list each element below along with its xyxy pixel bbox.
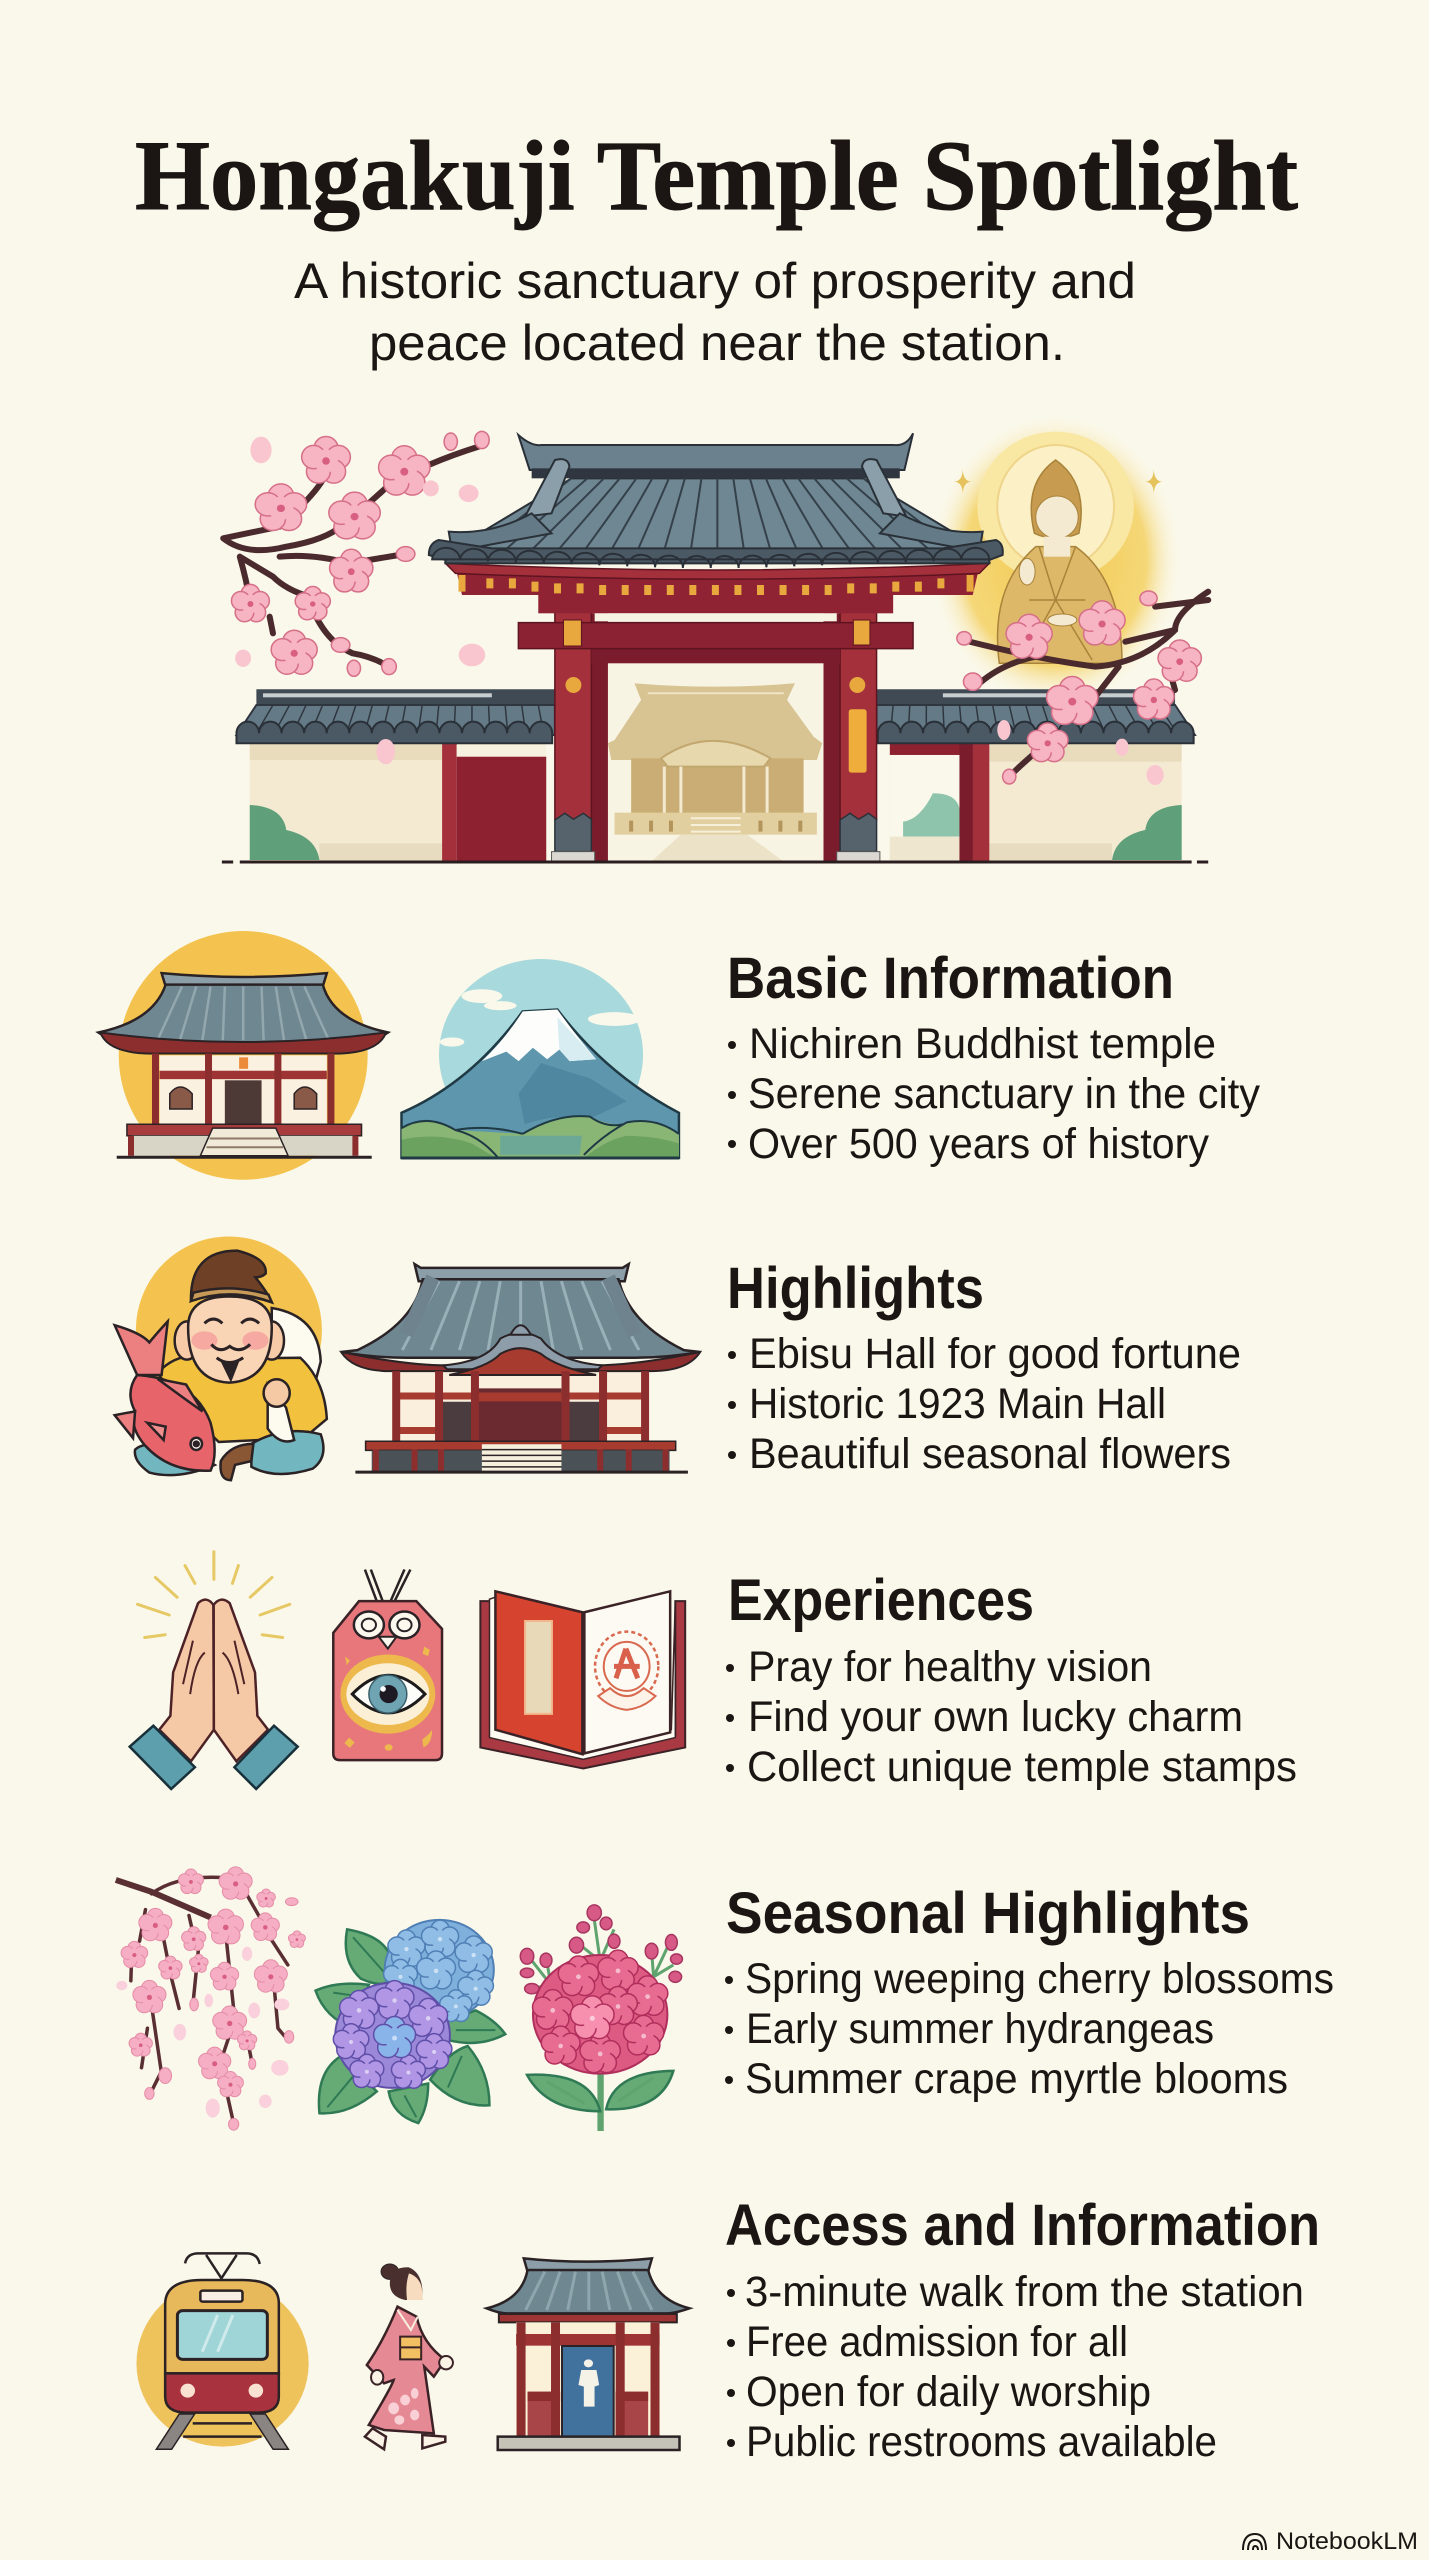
section: highlights icons — [115, 1236, 700, 1480]
text block: basic information — [727, 946, 1260, 1168]
icon: Mount Fuji — [402, 959, 679, 1170]
section: seasonal highlights icons — [116, 1867, 682, 2131]
text block: highlights — [727, 1256, 1241, 1478]
text block: highlights: Historic 1923 Main Hall — [749, 1380, 1166, 1428]
icon: restroom pavilion — [487, 2258, 689, 2450]
text block: highlights: Ebisu Hall for good fortune — [749, 1330, 1241, 1378]
text block: basic information: Nichiren Buddhist temple — [749, 1020, 1216, 1068]
icon: small temple on yellow sun — [98, 931, 388, 1180]
text block: highlights: Highlights — [727, 1256, 984, 1321]
subtitle: peace located near the station. — [369, 315, 1065, 371]
icon: hydrangeas — [315, 1920, 505, 2123]
section: access icons — [136, 2253, 689, 2450]
left cherry branch — [223, 431, 489, 676]
right wall — [877, 689, 1195, 862]
distant main hall seen through the gate — [608, 663, 824, 862]
Ebisu face — [191, 1319, 268, 1383]
text block: basic information: Basic Information — [727, 946, 1174, 1011]
text block: experiences: Pray for healthy vision — [748, 1643, 1152, 1691]
text block: basic information: Serene sanctuary in the city — [748, 1070, 1260, 1118]
text block: experiences — [726, 1568, 1297, 1791]
text block: seasonal highlights: Spring weeping cherry blossoms — [745, 1955, 1334, 2003]
icon: Ebisu with sea bream — [115, 1236, 327, 1480]
icon: historic main hall — [341, 1264, 700, 1472]
left wall — [236, 689, 555, 862]
icon: praying hands — [130, 1552, 298, 1789]
text block: access and information: Free admission for all — [746, 2318, 1128, 2366]
text block: experiences: Collect unique temple stamps — [747, 1743, 1297, 1791]
title: Hongakuji Temple Spotlight — [135, 120, 1298, 231]
text block: access and information: Access and Information — [725, 2193, 1320, 2258]
right cherry branch — [957, 591, 1208, 784]
text block: seasonal highlights: Early summer hydrangeas — [746, 2005, 1214, 2053]
golden Kannon figure — [930, 413, 1182, 707]
text block: seasonal highlights: Seasonal Highlights — [726, 1881, 1250, 1946]
ground line — [222, 860, 1208, 863]
section: basic information icons — [98, 931, 679, 1180]
text block: experiences: Experiences — [728, 1568, 1034, 1633]
icon: crape myrtle — [520, 1905, 682, 2131]
text block: seasonal highlights: Summer crape myrtle blooms — [745, 2055, 1288, 2103]
falling petals — [235, 437, 1164, 785]
hero illustration: temple gate with cherry blossoms and Kannon — [222, 413, 1208, 862]
subtitle: A historic sanctuary of prosperity and — [294, 253, 1136, 309]
icon: omamori eye charm — [333, 1570, 442, 1760]
icon: woman in kimono — [365, 2264, 453, 2449]
main gate pillars and beams — [518, 595, 913, 862]
text block: experiences: Find your own lucky charm — [748, 1693, 1243, 1741]
NotebookLM logo and watermark: NotebookLM — [1276, 2528, 1418, 2555]
text block: access and information — [725, 2193, 1320, 2466]
icon: weeping cherry blossoms — [116, 1867, 305, 2130]
subtitle — [294, 253, 1136, 371]
gate roof — [429, 433, 1003, 595]
text block: seasonal highlights — [725, 1881, 1334, 2103]
icon: goshuin stamp book — [480, 1591, 685, 1768]
text block: access and information: Public restrooms available — [746, 2418, 1217, 2466]
text block: highlights: Beautiful seasonal flowers — [749, 1430, 1231, 1478]
section: experiences icons — [130, 1552, 685, 1789]
text block: access and information: 3-minute walk from the station — [745, 2268, 1304, 2316]
icon: train — [136, 2253, 309, 2449]
text block: basic information: Over 500 years of history — [748, 1120, 1209, 1168]
text block: access and information: Open for daily worship — [746, 2368, 1151, 2416]
